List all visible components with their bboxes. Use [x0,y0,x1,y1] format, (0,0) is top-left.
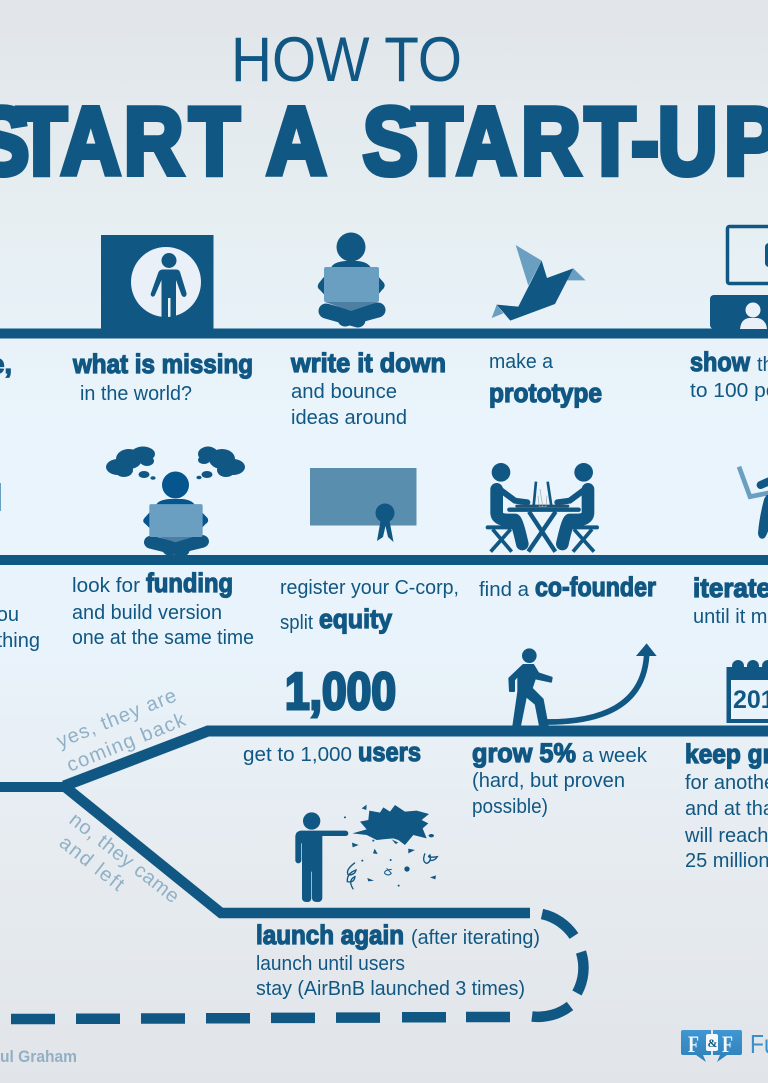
text: launch again: stay (AirBnB launched 3 times) [256,978,525,1000]
text: keep growing: 25 million [685,850,768,872]
text: write it down: write it down [290,348,446,378]
icon: monitor and user [710,226,768,329]
text: find a co-founder [479,572,656,602]
text: register your c-corp: equity [319,604,392,634]
text: make a prototype: prototype [489,378,602,408]
text: 1,000 big number: 1,000 [285,663,396,721]
streamers [347,863,356,889]
fragment: text at left edge, row 2 [0,604,40,652]
icon: calendar [726,660,768,723]
icon: certificate [310,468,416,542]
text: look for funding: look for [72,575,140,597]
icon: person with laptop [318,232,385,320]
text: get to 1,000 users: get to 1,000 [243,744,352,766]
text: show the [690,347,768,402]
text: keep growing: will reach [684,825,768,847]
text: register your c-corp [280,577,459,634]
title [0,25,768,194]
text: look for funding: funding [146,568,233,598]
text: what is missing [72,349,253,405]
icon: origami bird [492,245,586,321]
text: find a co-founder: co-founder [535,572,656,602]
text: make a prototype: make a [489,351,554,373]
text: what is missing: what is missing [72,349,253,379]
text: launch again: launch until users [256,953,405,975]
text: grow 5% a week: grow 5% [472,738,576,768]
dashed return loop [11,914,583,1019]
text: look for funding [72,568,254,649]
icon: person iterating on laptop [739,467,768,539]
text: write it down: and bounce [291,381,397,403]
text: grow 5% a week: (hard, but proven [472,770,625,792]
timeline row 1 [0,328,768,338]
text: iterate [693,573,768,628]
confetti [362,805,367,810]
text: launch again: (after iterating) [411,927,540,949]
timeline row 2 [0,555,768,565]
text: launch again [256,920,540,1000]
logo: funders and founders [681,1029,768,1062]
text: keep growing [684,739,768,872]
thought cloud right [196,446,245,479]
icon: two founders at a table [488,463,597,552]
text: grow 5% a week: possible) [472,796,548,818]
text: find a co-founder: find a [479,579,530,601]
thought cloud left [106,446,156,480]
text: grow 5% a week [472,738,648,818]
label: no, they came and left: no, they came [65,809,183,908]
text: register your c-corp: split [280,612,313,634]
burst [352,805,429,845]
text: look for funding: and build version [72,602,222,624]
logo mark: F [688,1032,699,1057]
text: get to 1,000 users [243,737,421,767]
icon: walker on growth curve [509,643,657,726]
fragment: laptop at left edge, row 2 [0,483,1,511]
icon: thinking person with laptop [106,446,245,550]
label: yes, they are coming back: coming back [64,709,190,777]
text: grow 5% a week: a week [582,745,648,767]
text: what is missing: in the world? [80,383,192,405]
branching timeline row 3 [0,731,768,913]
text: make a prototype [489,351,602,408]
text: launch again: launch again [256,920,404,950]
label: yes, they are coming back [54,685,190,777]
text: look for funding: one at the same time [72,627,254,649]
logo mark: F [722,1032,733,1057]
text: get to 1,000 users: users [358,737,421,767]
logo mark: & [708,1036,718,1050]
text: show the: show [690,347,751,377]
icon: person launching confetti [295,805,437,902]
text: write it down [290,348,446,429]
label: yes, they are coming back: yes, they are [54,685,180,753]
text: write it down: ideas around [291,407,407,429]
icon: person in spotlight [101,235,214,329]
logo mark [681,1030,742,1062]
label: no, they came and left: and left [55,832,129,896]
title line: how to: HOW TO [231,25,462,95]
text: register your c-corp: register your C-corp, [280,577,459,599]
